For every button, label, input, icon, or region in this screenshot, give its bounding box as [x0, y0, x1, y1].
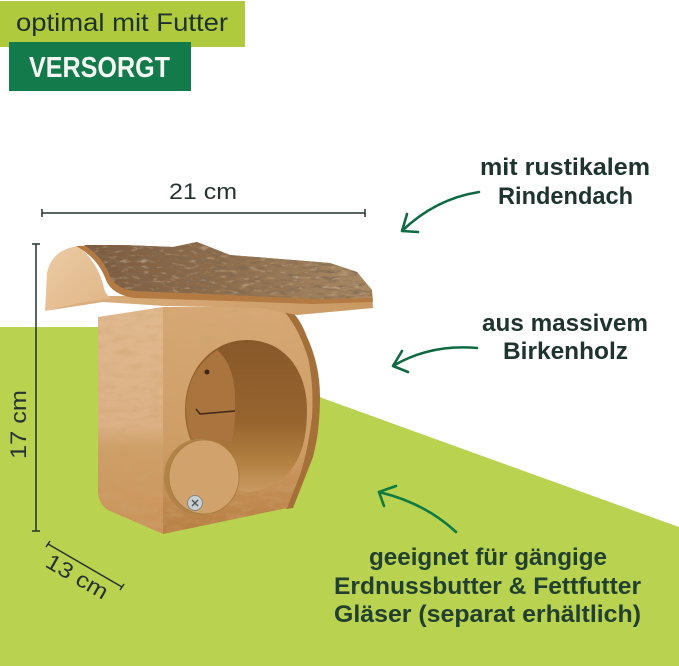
- roof cut end: [45, 246, 112, 311]
- bark surface: [84, 242, 372, 299]
- bark dark cracks: [84, 242, 372, 299]
- bark light flecks: [84, 242, 372, 299]
- roof underside: [45, 294, 373, 315]
- callout: suitable jars: Erdnussbutter & Fettfutter: [334, 573, 641, 600]
- feeder front face: [163, 307, 312, 534]
- header tag: optimal mit Futter: optimal mit Futter: [16, 9, 228, 37]
- badge: VERSORGT: VERSORGT: [29, 52, 170, 84]
- green background shape: [0, 327, 679, 666]
- round wooden perch: [164, 439, 239, 515]
- perch screw: [188, 496, 202, 510]
- callout: solid birch wood: aus massivem: [482, 310, 648, 337]
- dimension: height 17 cm: [6, 244, 40, 531]
- bark roof: [45, 242, 373, 315]
- dimension: depth 13 cm: [42, 541, 124, 604]
- arrow to roof: [402, 192, 479, 232]
- feeder left side face: [98, 307, 163, 534]
- wooden feeder house: [45, 242, 373, 534]
- badge: VERSORGT: [9, 42, 191, 91]
- callout: solid birch wood: Birkenholz: [503, 338, 628, 365]
- dimension: height 17 cm: 17 cm: [6, 390, 31, 459]
- callout: suitable jars: geeignet für gängige: [369, 544, 607, 571]
- dimension: depth 13 cm: 13 cm: [42, 549, 113, 604]
- callout: solid birch wood: [482, 310, 648, 365]
- bark rim: [76, 242, 373, 304]
- header tag: optimal mit Futter: [0, 1, 245, 47]
- dimension: width 21 cm: [42, 179, 365, 217]
- callout: rustic bark roof: Rindendach: [498, 183, 633, 210]
- arrow to opening: [379, 486, 456, 532]
- callout: suitable jars: [334, 544, 641, 628]
- arrow to wood body: [393, 347, 477, 372]
- callout: rustic bark roof: mit rustikalem: [480, 154, 650, 181]
- callout: suitable jars: Gläser (separat erhältlich): [334, 601, 641, 628]
- callout: rustic bark roof: [480, 154, 650, 210]
- feeder bark rim: [280, 308, 320, 509]
- dimension: width 21 cm: 21 cm: [169, 179, 237, 204]
- feeder round opening: [185, 340, 307, 492]
